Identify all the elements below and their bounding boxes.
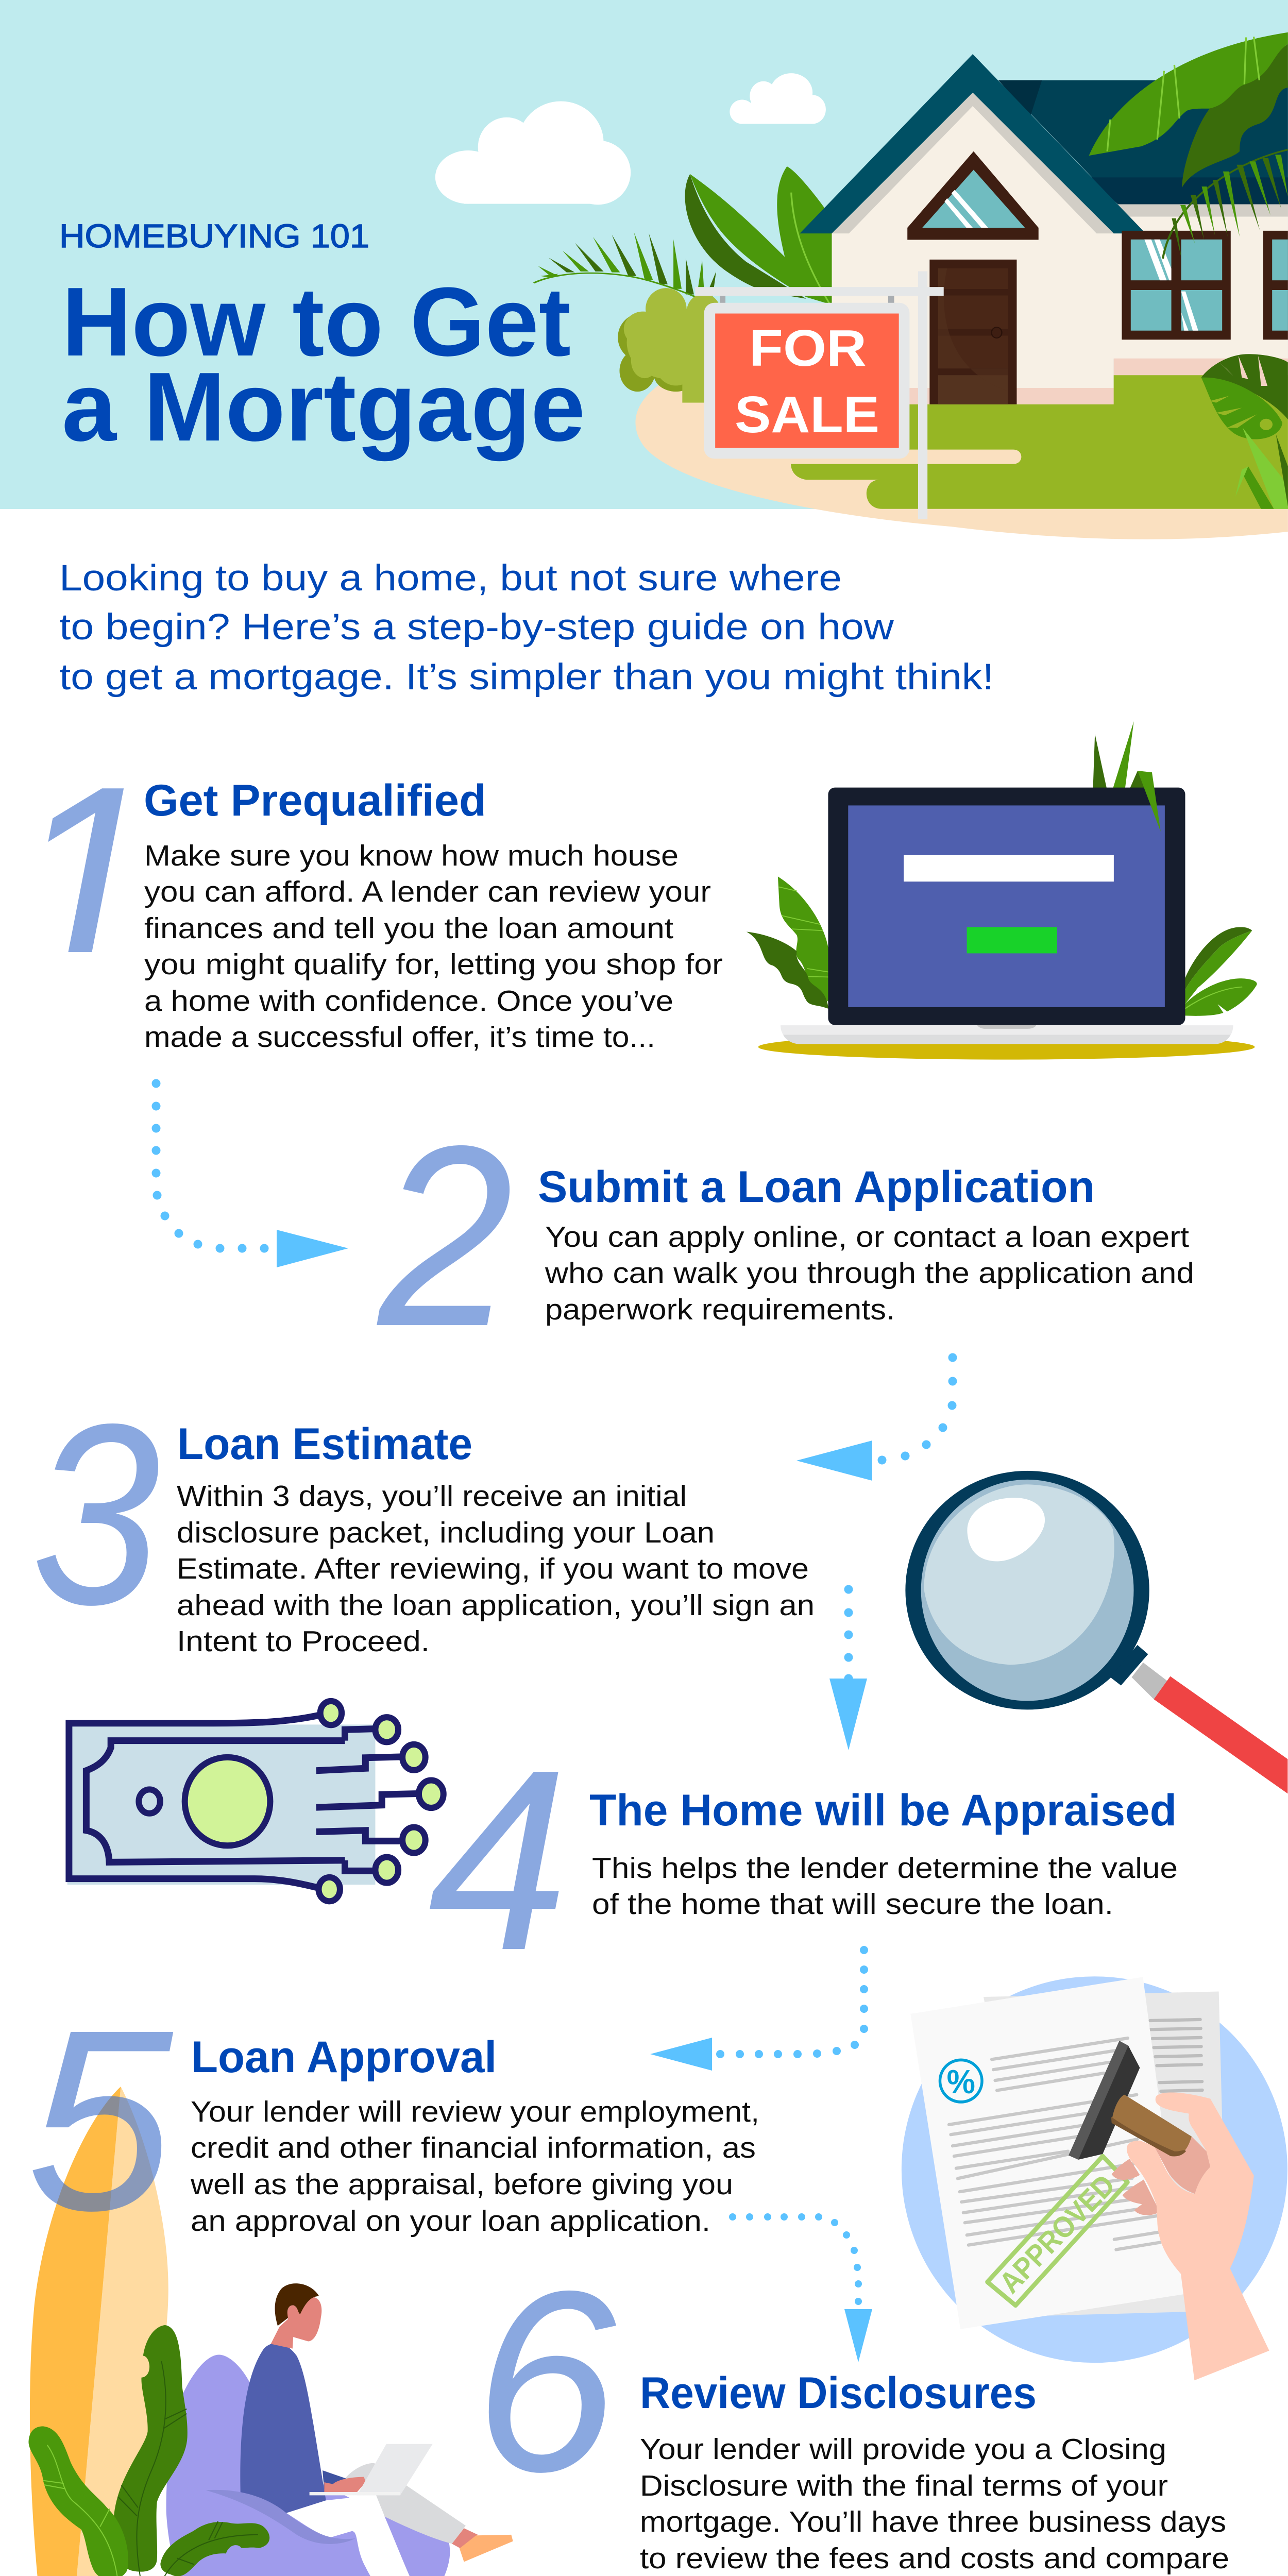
- stamper handle: [1111, 2095, 1192, 2156]
- bean bag fold: [206, 2490, 355, 2544]
- arrow: step 1 to step 2: [151, 1079, 348, 1267]
- body text: [545, 1221, 1194, 1326]
- left leaves: [747, 876, 828, 1009]
- body text: made a successful offer, it’s time to...: [144, 1021, 655, 1054]
- body text: who can walk you through the application and: [545, 1257, 1194, 1290]
- body text: [177, 1480, 815, 1658]
- laptop keyboard base: [781, 1025, 1233, 1044]
- panel: hero banner: [0, 0, 1288, 539]
- sign text: FOR: [749, 319, 867, 377]
- gable window: [907, 151, 1039, 240]
- panel: step 3: [31, 1370, 1287, 1793]
- heading: Review Disclosures: [640, 2368, 1037, 2418]
- body text: disclosure packet, including your Loan: [177, 1516, 715, 1549]
- intro text: [59, 558, 994, 698]
- body text: You can apply online, or contact a loan expert: [545, 1221, 1189, 1253]
- body text: This helps the lender determine the value: [592, 1852, 1178, 1885]
- body text: to review the fees and costs and compare: [640, 2542, 1229, 2575]
- arrow: step 2 to step 3: [796, 1353, 957, 1481]
- number 5: 5: [27, 1976, 174, 2264]
- bush: [618, 288, 727, 403]
- sand path: [635, 372, 1288, 539]
- number 4: 4: [428, 1716, 568, 2004]
- palm frond right: [1163, 149, 1288, 259]
- door: [929, 260, 1016, 404]
- body text: Estimate. After reviewing, if you want to move: [177, 1552, 809, 1585]
- sleeve: [323, 2470, 352, 2492]
- arrow: step 3 to step 4: [829, 1585, 867, 1750]
- body text: Make sure you know how much house: [144, 839, 679, 872]
- palm frond left: [534, 232, 716, 301]
- illustration: approved document with stamp: [902, 1976, 1287, 2380]
- body text: Intent to Proceed.: [177, 1625, 430, 1658]
- lawn: [791, 375, 1288, 509]
- icon: small cloud: [730, 73, 826, 124]
- body text: Within 3 days, you’ll receive an initial: [177, 1480, 687, 1513]
- approved stamp border: [987, 2156, 1128, 2306]
- back leg and foot: [345, 2463, 513, 2562]
- sign text: [735, 319, 879, 444]
- hand on laptop: [324, 2477, 366, 2492]
- body text: an approval on your loan application.: [191, 2205, 710, 2238]
- body text: [592, 1852, 1178, 1921]
- hand: [1112, 2093, 1269, 2380]
- body text: [144, 839, 723, 1054]
- panel: step 4: [67, 1701, 1178, 2071]
- heading: Loan Estimate: [177, 1419, 472, 1469]
- icon: dollar bill circuit: [67, 1701, 444, 1901]
- potted plant: [28, 2325, 269, 2576]
- laptop: [310, 2444, 433, 2495]
- intro text: Looking to buy a home, but not sure where: [59, 558, 842, 599]
- number 3: 3: [31, 1370, 162, 1658]
- body text: finances and tell you the loan amount: [144, 912, 673, 945]
- heading: Get Prequalified: [144, 776, 486, 825]
- panel: step 2: [375, 1092, 1194, 1481]
- number 2: 2: [375, 1092, 513, 1380]
- approved stamp text: APPROVED: [993, 2168, 1122, 2300]
- heading: Loan Approval: [191, 2032, 497, 2082]
- body text: [640, 2433, 1229, 2576]
- laptop screen: [828, 788, 1185, 1025]
- dark rear roof: [998, 80, 1288, 204]
- arrow: step 4 to step 5: [650, 1946, 868, 2071]
- body text: Your lender will review your employment,: [191, 2095, 759, 2128]
- body text: mortgage. You’ll have three business days: [640, 2505, 1226, 2538]
- title: a Mortgage: [62, 352, 585, 462]
- front page: [910, 1977, 1184, 2329]
- intro text: to begin? Here’s a step-by-step guide on how: [59, 607, 894, 648]
- body text: of the home that will secure the loan.: [592, 1888, 1113, 1921]
- yellow base shadow: [758, 1035, 1255, 1060]
- intro text: to get a mortgage. It’s simpler than you might think!: [59, 657, 994, 698]
- panel: step 1: [10, 721, 1257, 1267]
- kicker: homebuying 101: HOMEBUYING 101: [59, 217, 369, 255]
- percent badge: [940, 2060, 982, 2102]
- surfboard: [30, 2087, 168, 2576]
- house windows: [1122, 231, 1288, 340]
- body text: credit and other financial information, as: [191, 2131, 756, 2164]
- percent badge: %: [947, 2063, 975, 2101]
- panel: step 5: [27, 1976, 872, 2362]
- torso: [240, 2343, 326, 2513]
- heading: The Home will be Appraised: [589, 1786, 1177, 1835]
- house wall: [832, 105, 1288, 404]
- back page: [984, 1992, 1223, 2316]
- monstera plant: [1201, 354, 1288, 509]
- body text: you can afford. A lender can review your: [144, 875, 711, 908]
- illustration: person with surfboard and plants: [28, 2087, 513, 2576]
- sign text: SALE: [735, 386, 879, 444]
- body text: a home with confidence. Once you’ve: [144, 985, 673, 1018]
- for sale sign frame: [695, 272, 944, 519]
- title: [62, 267, 585, 462]
- body text: Disclosure with the final terms of your: [640, 2469, 1168, 2502]
- body text: well as the appraisal, before giving you: [190, 2168, 733, 2201]
- stamper head: [1069, 2041, 1140, 2160]
- heading: Submit a Loan Application: [538, 1162, 1095, 1212]
- number 6: 6: [474, 2237, 618, 2525]
- body text: Your lender will provide you a Closing: [640, 2433, 1166, 2466]
- head: [271, 2283, 321, 2349]
- body text: ahead with the loan application, you’ll sign an: [177, 1589, 815, 1622]
- bean bag: [166, 2355, 450, 2576]
- body text: [190, 2095, 759, 2238]
- icon: magnifying glass: [913, 1475, 1287, 1793]
- panel: step 6: [474, 2237, 1229, 2576]
- body text: paperwork requirements.: [545, 1293, 895, 1326]
- top right tropical leaves: [1089, 32, 1288, 188]
- right leaves: [1185, 927, 1257, 1016]
- title: How to Get: [62, 267, 571, 377]
- icon: large cloud: [435, 101, 631, 205]
- number 1: 1: [10, 731, 159, 1030]
- plant leaves behind house: [685, 166, 834, 306]
- front leg and foot: [286, 2496, 466, 2576]
- grass blades: [1093, 721, 1145, 788]
- arrow: step 5 to step 6: [729, 2213, 872, 2362]
- illustration: laptop with plants: [747, 721, 1257, 1060]
- grass blade over screen: [1138, 771, 1161, 832]
- roof gable: [800, 54, 1146, 233]
- blue circle backdrop: [902, 1976, 1287, 2363]
- body text: you might qualify for, letting you shop for: [144, 948, 723, 981]
- illustration: house with for sale sign: [618, 32, 1288, 539]
